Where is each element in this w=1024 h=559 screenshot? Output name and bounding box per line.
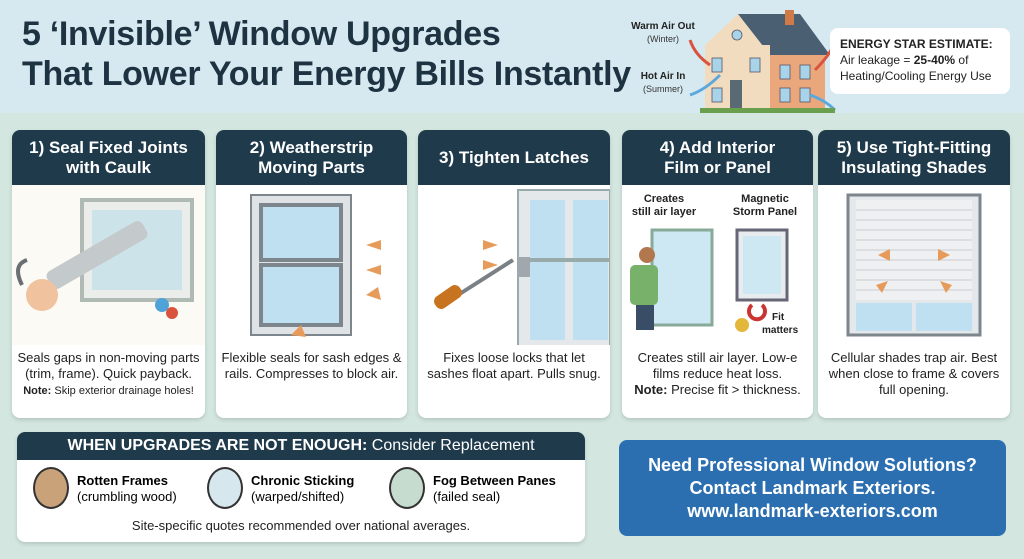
- panel: 5 shades: [818, 130, 1010, 418]
- item: chronic sticking: Chronic Sticking: [251, 473, 354, 488]
- house illustration: Hot Air In: [641, 71, 685, 82]
- energy star callout: [830, 28, 1010, 94]
- call to action: Contact Landmark Exteriors.: [689, 478, 936, 498]
- text: caulk description: Seals gaps in non-moving parts (trim, frame). Quick payback.: [17, 350, 200, 381]
- item: chronic sticking: [207, 467, 354, 509]
- title: That Lower Your Energy Bills Instantly: [22, 55, 631, 93]
- icon: cellular shade: [846, 194, 982, 336]
- item: rotten frames: [33, 467, 177, 509]
- text: weatherstrip description: Flexible seals for sash edges & rails. Compresses to block air.: [222, 350, 401, 381]
- icon: film and magnetic panel: Magnetic: [741, 193, 789, 205]
- text: latch description: Fixes loose locks that let sashes float apart. Pulls snug.: [427, 350, 601, 381]
- panel: 4 interior film: Film or Panel: [664, 158, 771, 176]
- energy star callout: ENERGY STAR ESTIMATE:: [840, 37, 993, 51]
- panel: 3 latches: 3) Tighten Latches: [439, 148, 589, 166]
- panel: 4 interior film: 4) Add Interior: [660, 138, 775, 156]
- heading: replacement: [17, 432, 585, 460]
- item: rotten frames: Rotten Frames: [77, 473, 168, 488]
- icon: caulk gun: [12, 185, 205, 345]
- panel: replacement: [17, 432, 585, 542]
- item: fog between panes: (failed seal): [433, 489, 500, 504]
- item: chronic sticking: (warped/shifted): [251, 489, 344, 504]
- icon: screwdriver and latch: [434, 189, 610, 345]
- call to action: [619, 440, 1006, 536]
- text: film description: Creates still air layer. Low-e films reduce heat loss.: [638, 350, 797, 381]
- call to action: www.landmark-exteriors.com: [687, 501, 938, 521]
- icon: film and magnetic panel: Storm Panel: [733, 206, 797, 218]
- text: note: Site-specific quotes recommended over national averages.: [132, 518, 470, 533]
- call to action: Need Professional Window Solutions?: [648, 455, 977, 475]
- icon: film and magnetic panel: still air layer: [632, 206, 697, 218]
- icon: film and magnetic panel: Creates: [644, 193, 684, 205]
- panel: 2 weatherstrip: [216, 130, 407, 418]
- panel: 3 latches: [418, 130, 610, 418]
- icon: sash window: [250, 194, 381, 337]
- text: film description: Note: Precise fit > thickness.: [634, 382, 801, 397]
- icon: film and magnetic panel: matters: [762, 325, 799, 336]
- panel: 1 caulk: [12, 130, 205, 418]
- house illustration: (Summer): [643, 84, 683, 94]
- house illustration: [631, 10, 836, 113]
- panel: 1 caulk: with Caulk: [66, 158, 151, 176]
- text: caulk description: Note: Skip exterior drainage holes!: [23, 385, 194, 397]
- text: film description: [634, 350, 801, 397]
- panel: 2 weatherstrip: Moving Parts: [258, 158, 365, 176]
- panel: 4 interior film: [622, 130, 813, 418]
- panel: 1 caulk: 1) Seal Fixed Joints: [29, 138, 188, 156]
- energy star callout: Air leakage = 25-40% of: [840, 53, 968, 67]
- energy star callout: Heating/Cooling Energy Use: [840, 69, 991, 83]
- house illustration: (Winter): [647, 34, 679, 44]
- title: 5 ‘Invisible’ Window Upgrades: [22, 15, 500, 53]
- icon: film and magnetic panel: Fit: [772, 312, 785, 323]
- panel: 2 weatherstrip: 2) Weatherstrip: [250, 138, 373, 156]
- item: fog between panes: [389, 467, 556, 509]
- panel: 5 shades: Insulating Shades: [841, 158, 987, 176]
- heading: replacement: WHEN UPGRADES ARE NOT ENOUGH: Consider Replacement: [67, 437, 535, 454]
- text: shades description: Cellular shades trap air. Best when close to frame & covers full opening.: [829, 350, 999, 397]
- icon: film and magnetic panel: [630, 193, 799, 336]
- title: [22, 15, 631, 93]
- header background: [0, 0, 1024, 113]
- house illustration: Warm Air Out: [631, 21, 696, 32]
- item: rotten frames: (crumbling wood): [77, 489, 177, 504]
- item: fog between panes: Fog Between Panes: [433, 473, 556, 488]
- panel: 5 shades: 5) Use Tight-Fitting: [837, 138, 991, 156]
- text: caulk description: [17, 350, 200, 397]
